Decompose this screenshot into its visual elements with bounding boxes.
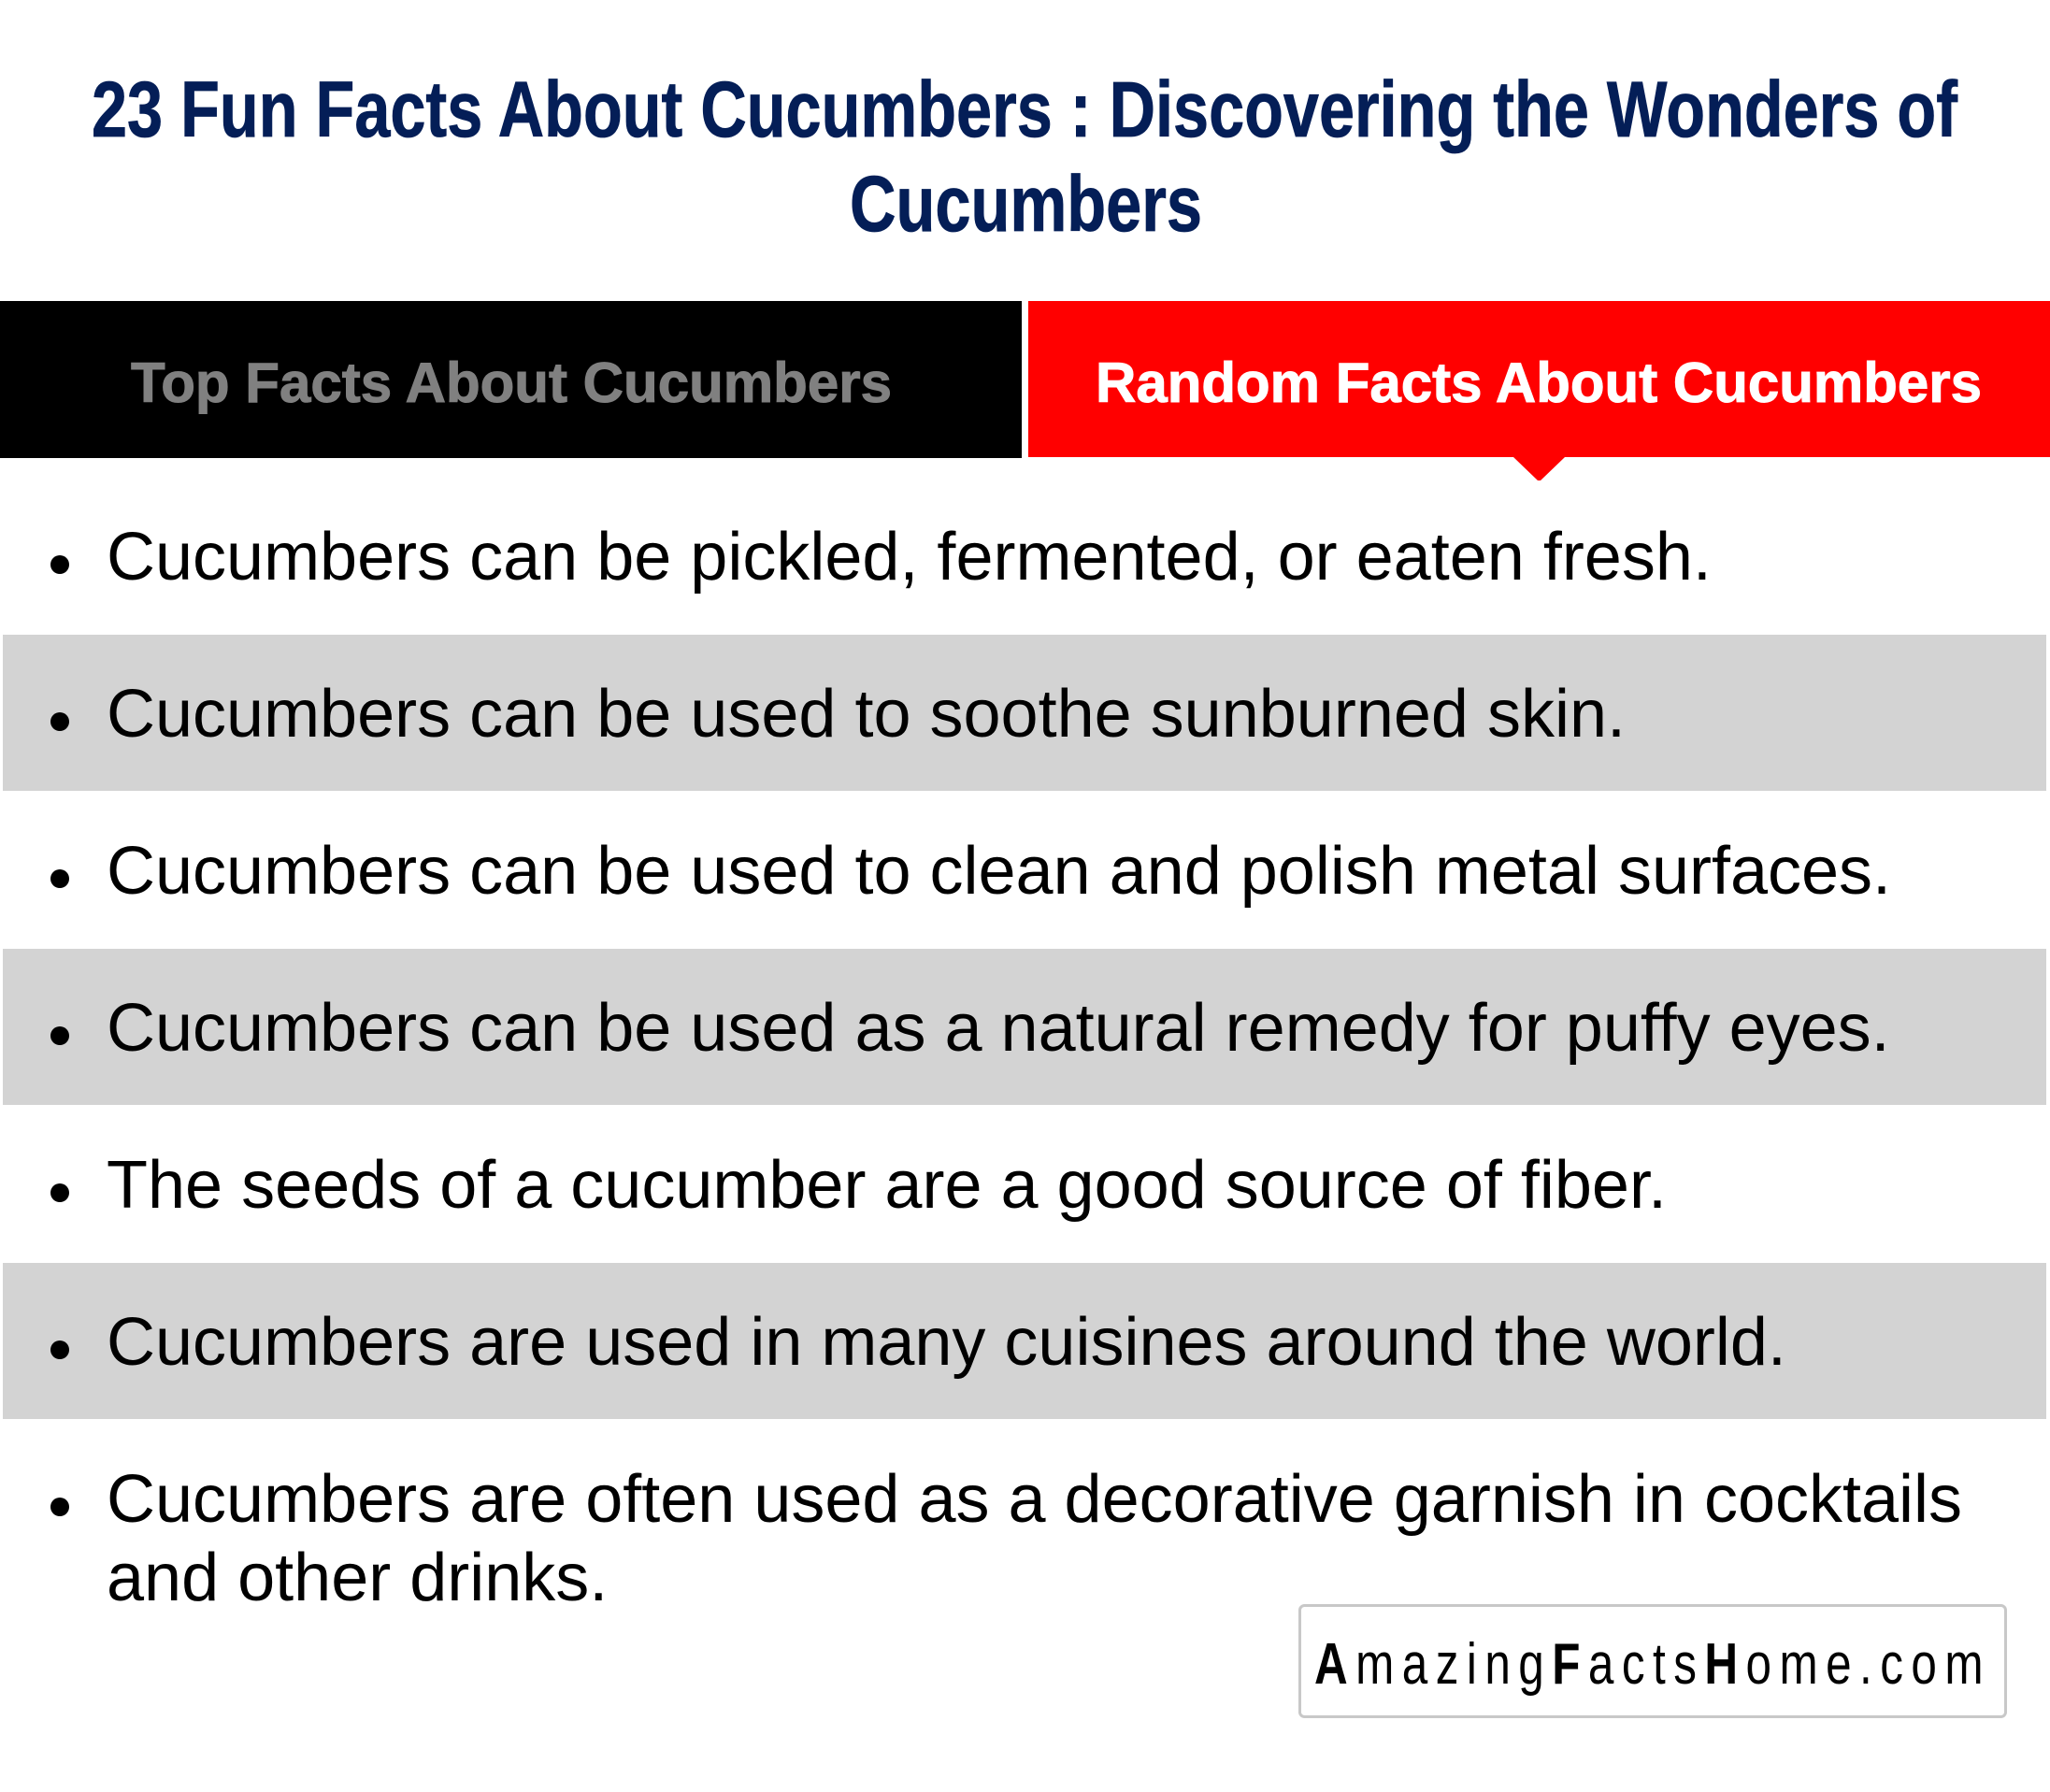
tab: random facts	[1028, 301, 2050, 480]
fact 7	[50, 1462, 1962, 1615]
tab: top facts: Top Facts About Cucumbers	[131, 351, 892, 414]
fact 2	[3, 635, 2046, 791]
title	[92, 65, 1958, 248]
fact 6: Cucumbers are used in many cuisines around the world.	[107, 1305, 1786, 1380]
tab: top facts	[0, 301, 1022, 458]
fact 4: Cucumbers can be used as a natural remedy for puffy eyes.	[107, 991, 1890, 1066]
logo: AmazingFactsHome.com: AmazingFactsHome.com	[1314, 1632, 1991, 1697]
fact 1: Cucumbers can be pickled, fermented, or eaten fresh.	[107, 520, 1712, 595]
fact 3: Cucumbers can be used to clean and polish metal surfaces.	[107, 834, 1891, 909]
fact 4	[3, 949, 2046, 1105]
fact 7: Cucumbers are often used as a decorative garnish in cocktails	[107, 1462, 1962, 1537]
fact 7: and other drinks.	[107, 1541, 608, 1615]
fact 2: Cucumbers can be used to soothe sunburned skin.	[107, 677, 1626, 752]
logo: AmazingFactsHome.com	[1299, 1606, 2006, 1716]
title: Cucumbers	[850, 160, 1202, 248]
fact 6	[3, 1263, 2046, 1419]
tab: random facts: Random Facts About Cucumbers	[1096, 351, 1982, 414]
fact 5: The seeds of a cucumber are a good source of fiber.	[107, 1148, 1667, 1223]
